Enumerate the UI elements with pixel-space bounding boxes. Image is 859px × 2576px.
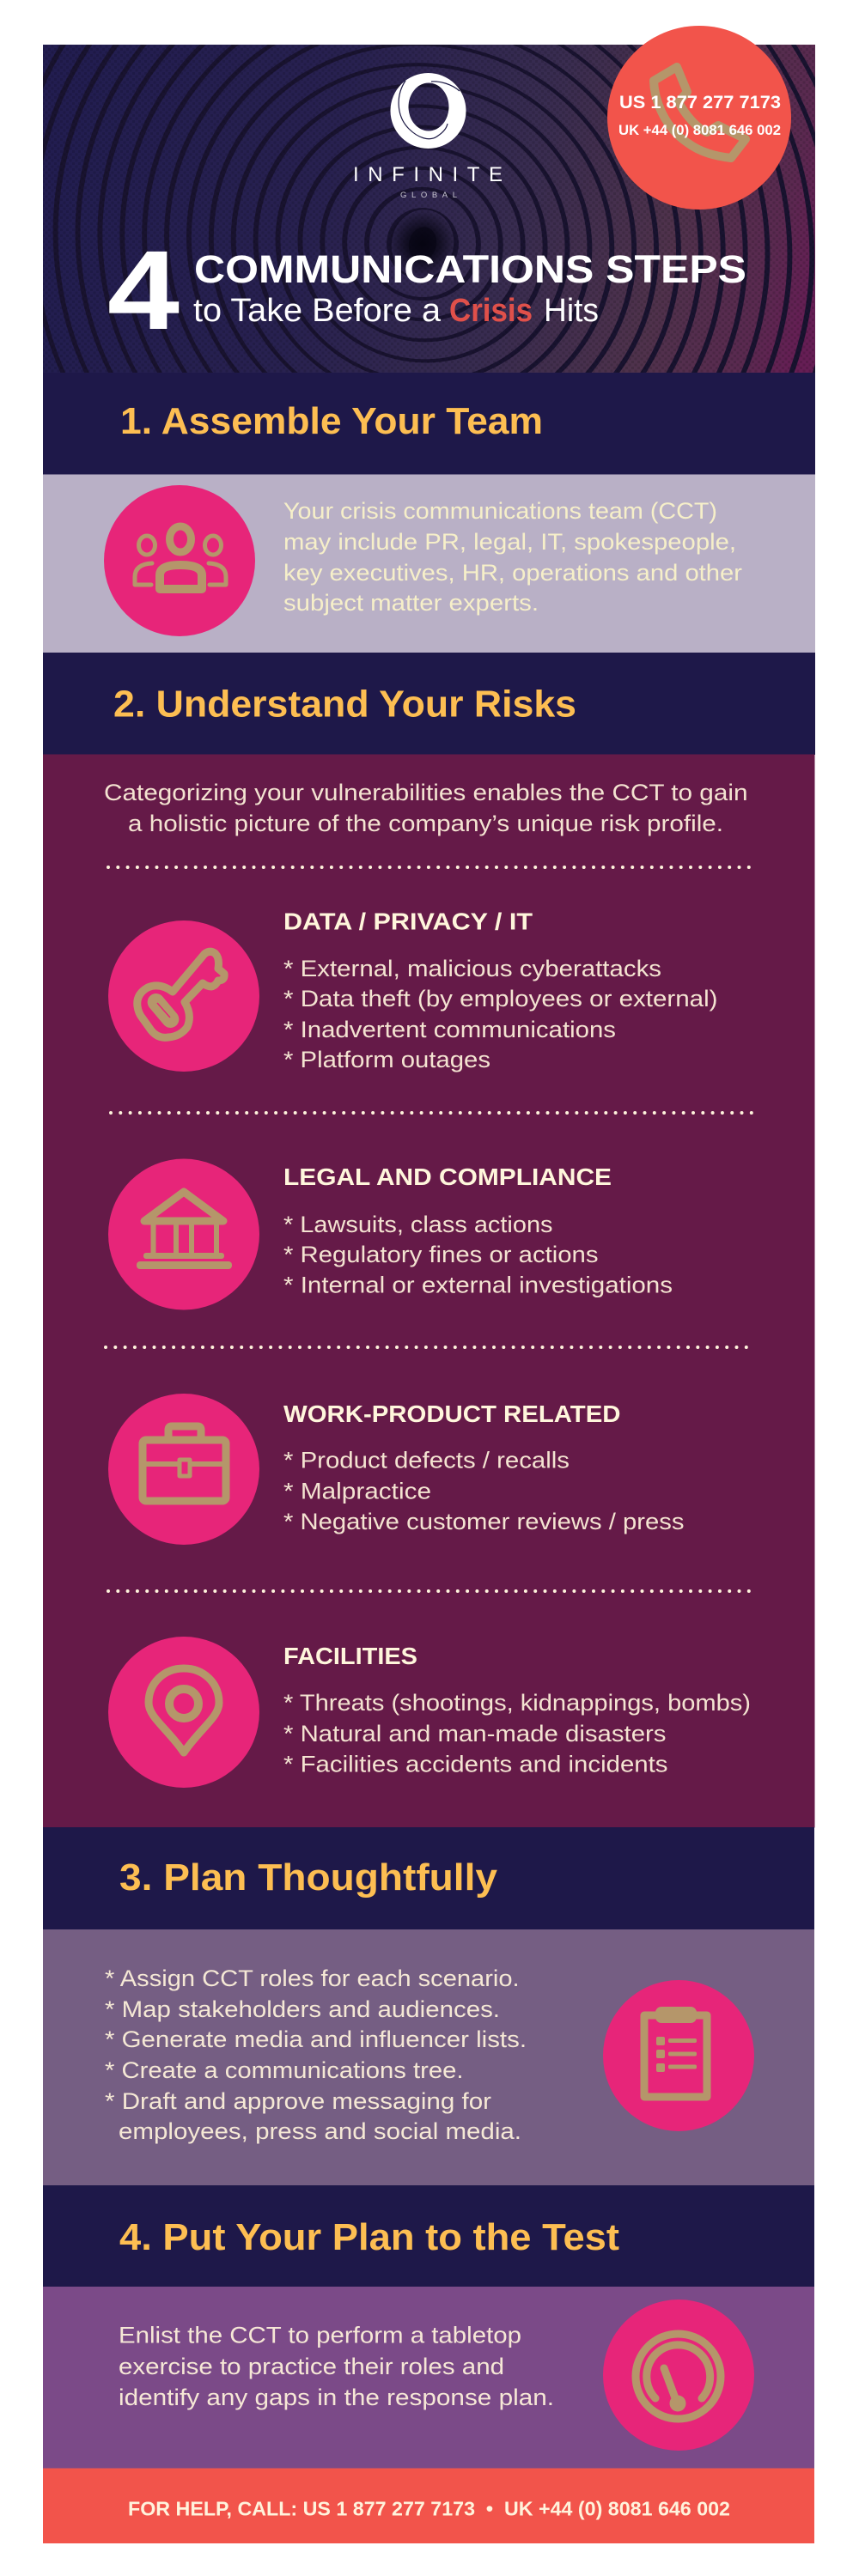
step 1 heading band bbox=[43, 373, 815, 475]
step 1 text: Your crisis communications team (CCT) bbox=[283, 498, 717, 524]
risk: work-product related bbox=[108, 1394, 684, 1545]
title: COMMUNICATIONS STEPS bbox=[194, 247, 746, 291]
risk: data privacy IT bbox=[108, 908, 718, 1072]
step 2 panel bbox=[43, 754, 814, 1827]
risk: facilities: FACILITIES bbox=[283, 1643, 417, 1669]
title: 4 bbox=[107, 227, 180, 353]
step 4 text: Enlist the CCT to perform a tabletop bbox=[119, 2323, 521, 2348]
risk: data privacy IT: * External, malicious cyberattacks bbox=[283, 956, 661, 981]
icon: gauge bbox=[603, 2300, 754, 2451]
step 4 text: identify any gaps in the response plan. bbox=[119, 2385, 554, 2410]
risk: work-product related: * Malpractice bbox=[283, 1479, 431, 1504]
intro text bbox=[104, 780, 747, 836]
step 4 heading band bbox=[43, 2185, 814, 2287]
risk: work-product related: * Negative customer reviews / press bbox=[283, 1509, 684, 1534]
risk: facilities: * Threats (shootings, kidnappings, bombs) bbox=[283, 1690, 751, 1716]
risk: facilities: * Facilities accidents and incidents bbox=[283, 1752, 668, 1777]
title: Hits bbox=[544, 293, 599, 329]
risk: legal and compliance: * Lawsuits, class actions bbox=[283, 1212, 553, 1237]
risk: legal and compliance bbox=[108, 1159, 673, 1310]
title: to Take Before a bbox=[193, 293, 442, 329]
risk: legal and compliance: LEGAL AND COMPLIANCE bbox=[283, 1163, 612, 1190]
icon: key bbox=[137, 951, 224, 1037]
step 4 heading band: 4. Put Your Plan to the Test bbox=[119, 2216, 619, 2258]
phone callout bbox=[607, 26, 791, 210]
intro text: Categorizing your vulnerabilities enables the CCT to gain bbox=[104, 780, 747, 805]
step 3 heading band: 3. Plan Thoughtfully bbox=[119, 1856, 498, 1899]
title bbox=[107, 227, 746, 353]
step 3 list: * Draft and approve messaging for bbox=[105, 2088, 491, 2114]
step 1 text bbox=[283, 498, 742, 616]
risk: legal and compliance: * Regulatory fines or actions bbox=[283, 1242, 598, 1267]
step 2 heading band: 2. Understand Your Risks bbox=[113, 683, 576, 725]
intro text: a holistic picture of the company’s unique risk profile. bbox=[128, 811, 723, 836]
phone callout: UK +44 (0) 8081 646 002 bbox=[618, 122, 781, 138]
risk: work-product related: WORK-PRODUCT RELATED bbox=[283, 1400, 620, 1427]
step 1 text: key executives, HR, operations and other bbox=[283, 560, 742, 586]
step 1 heading band: 1. Assemble Your Team bbox=[120, 400, 543, 442]
step 4 text bbox=[119, 2323, 554, 2410]
step 4 text: exercise to practice their roles and bbox=[119, 2354, 504, 2379]
icon: team bbox=[104, 485, 255, 636]
step 3 list: * Create a communications tree. bbox=[105, 2057, 464, 2083]
step 3 panel bbox=[43, 1929, 814, 2186]
footer band: FOR HELP, CALL: US 1 877 277 7173 • UK +44 (0) 8081 646 002 bbox=[128, 2498, 730, 2520]
risk: legal and compliance: * Internal or external investigations bbox=[283, 1273, 673, 1298]
step 1 text: may include PR, legal, IT, spokespeople, bbox=[283, 529, 736, 555]
step 1 text: subject matter experts. bbox=[283, 590, 539, 616]
risk: data privacy IT: * Platform outages bbox=[283, 1047, 490, 1072]
step 3 list bbox=[105, 1965, 527, 2144]
footer band bbox=[43, 2468, 814, 2543]
icon: map pin bbox=[149, 1668, 219, 1753]
risk: facilities: * Natural and man-made disasters bbox=[283, 1721, 667, 1747]
risk: facilities bbox=[108, 1637, 751, 1788]
icon: briefcase bbox=[143, 1426, 226, 1501]
risk: data privacy IT: * Data theft (by employees or external) bbox=[283, 986, 718, 1012]
step 4 panel bbox=[43, 2287, 814, 2469]
risk: work-product related: * Product defects / recalls bbox=[283, 1448, 570, 1473]
step 3 list: * Map stakeholders and audiences. bbox=[105, 1996, 500, 2022]
logo: Infinite Global: INFINITE bbox=[353, 163, 503, 186]
icon: phone bbox=[654, 67, 746, 158]
step 1 panel bbox=[43, 474, 815, 653]
step 3 list: * Assign CCT roles for each scenario. bbox=[105, 1965, 520, 1991]
risk: data privacy IT: DATA / PRIVACY / IT bbox=[283, 908, 533, 934]
step 2 heading band bbox=[43, 653, 815, 755]
icon: courthouse bbox=[137, 1192, 232, 1269]
title: Crisis bbox=[449, 293, 533, 329]
header panel bbox=[43, 26, 815, 373]
risk: data privacy IT: * Inadvertent communications bbox=[283, 1017, 616, 1042]
step 3 heading band bbox=[43, 1827, 814, 1930]
header background: coiled rope photo bbox=[43, 45, 815, 373]
step 3 list: employees, press and social media. bbox=[119, 2118, 521, 2144]
phone callout: US 1 877 277 7173 bbox=[619, 93, 781, 112]
step 3 list: * Generate media and influencer lists. bbox=[105, 2026, 527, 2052]
logo: Infinite Global: GLOBAL bbox=[400, 191, 457, 200]
logo: Infinite Global bbox=[353, 73, 503, 200]
icon: clipboard bbox=[603, 1980, 754, 2131]
